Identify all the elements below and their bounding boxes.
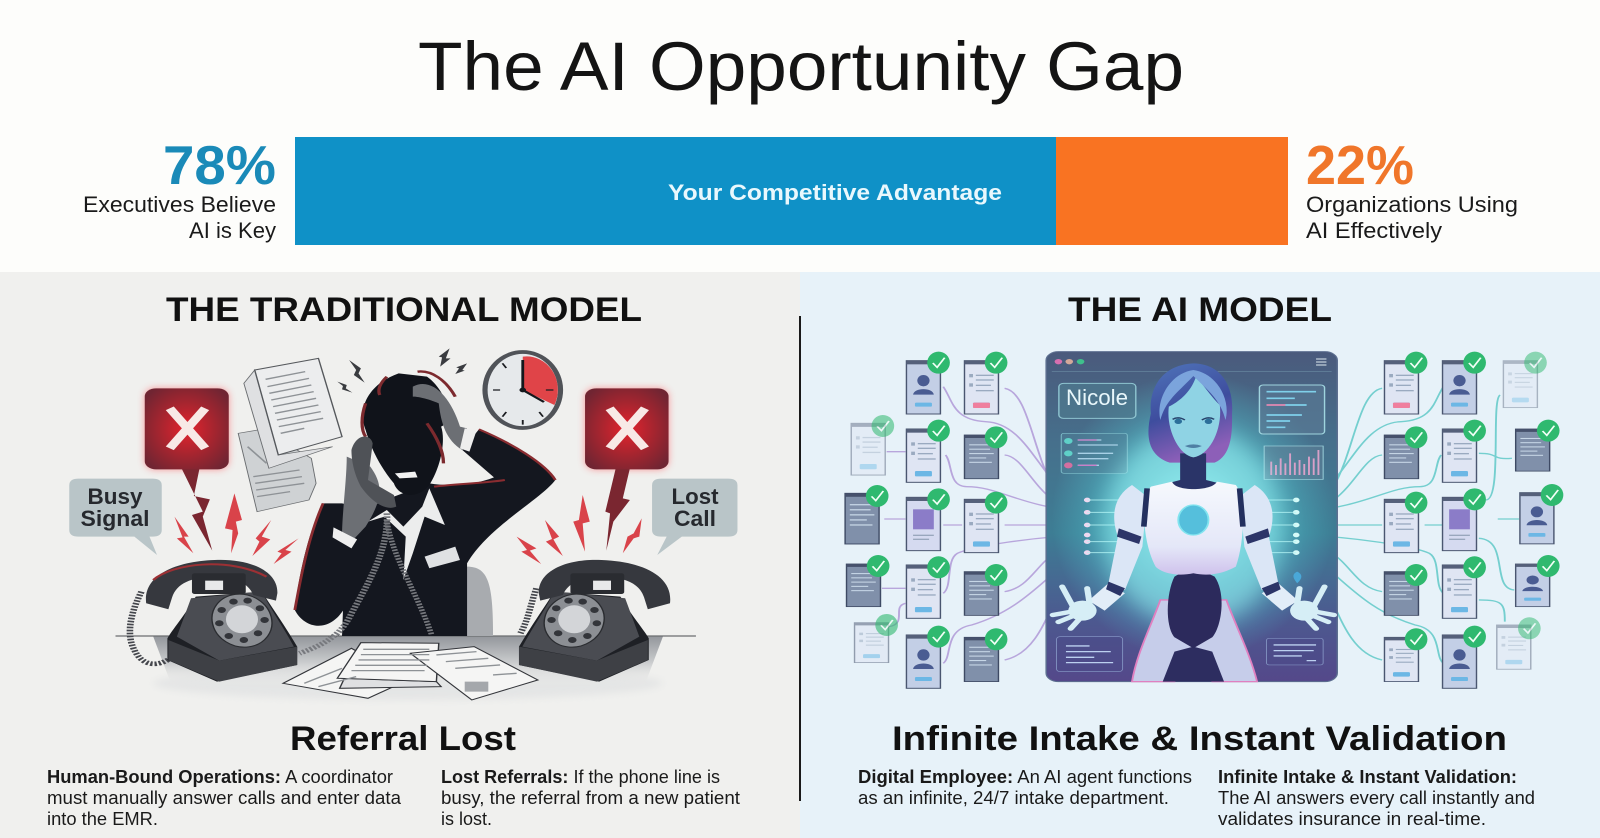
link dots — [1084, 498, 1090, 555]
AI woman figure — [1053, 363, 1334, 682]
stat: 78 percent: AI is Key — [189, 218, 276, 243]
illustration: AI agent connected to documents — [845, 352, 1563, 688]
speech bubble: lost — [652, 479, 737, 555]
bubble label: lost call: Call — [674, 506, 716, 531]
text: lost referrals: Lost Referrals: If the phone line is — [441, 767, 720, 787]
panel: traditional model — [0, 272, 800, 838]
text: infinite intake validation: validates insurance in real-time. — [1218, 809, 1486, 829]
bubble label: lost call — [672, 484, 719, 531]
stat: 78 percent — [83, 134, 276, 243]
stress marks — [337, 348, 467, 393]
hand on phone — [342, 457, 379, 542]
document cards left — [845, 361, 998, 688]
speech bubble: busy — [69, 479, 162, 555]
hand on head — [413, 384, 467, 450]
bubble label: busy signal — [80, 484, 150, 531]
heading: traditional: THE TRADITIONAL MODEL — [166, 291, 642, 329]
stat: 22 percent: 22% — [1306, 134, 1414, 196]
text: lost referrals: is lost. — [441, 809, 492, 829]
head and hair — [363, 373, 448, 495]
mouth — [395, 472, 418, 478]
subheading: infinite intake: Infinite Intake & Instant Validation — [892, 720, 1507, 758]
shirt — [368, 488, 445, 580]
stat: 22 percent: AI Effectively — [1306, 218, 1442, 243]
text: digital employee: Digital Employee: An AI agent functions — [858, 767, 1192, 787]
stat: 78 percent: 78% — [163, 134, 276, 196]
Nicole name box — [1059, 383, 1136, 418]
lightning bolts — [174, 493, 642, 564]
subheading: referral lost: Referral Lost — [290, 720, 516, 758]
text: infinite intake validation: The AI answers every call instantly and — [1218, 788, 1535, 808]
flying papers — [238, 429, 316, 512]
text: lost referrals: busy, the referral from a new patient — [441, 788, 740, 808]
text: human-bound operations — [47, 767, 402, 829]
text: digital employee: as an infinite, 24/7 intake department. — [858, 788, 1169, 808]
stat: 22 percent: Organizations Using — [1306, 192, 1518, 217]
bar chart panel — [1264, 446, 1323, 479]
text: human-bound operations: into the EMR. — [47, 809, 158, 829]
gap bar — [295, 137, 1288, 245]
chair — [455, 567, 493, 636]
text: human-bound operations: must manually answer calls and enter data — [47, 788, 402, 808]
text: human-bound operations: Human-Bound Operations: A coordinator — [47, 767, 393, 787]
warning: left red X — [145, 388, 229, 551]
data panel left — [1061, 433, 1127, 473]
badge — [425, 547, 460, 568]
bubble label: lost call: Lost — [672, 484, 719, 509]
chest plate — [1144, 482, 1243, 575]
person jacket — [295, 429, 555, 636]
stat: 22 percent — [1306, 134, 1518, 243]
text: infinite intake validation: Infinite Intake & Instant Validation: — [1218, 767, 1517, 787]
desk papers — [283, 643, 538, 700]
heading: AI model: THE AI MODEL — [1068, 291, 1332, 329]
bar label: Your Competitive Advantage — [668, 180, 1002, 205]
bubble label: busy signal: Busy — [88, 484, 143, 509]
text: infinite intake validation — [1218, 767, 1535, 829]
agent screen — [1046, 352, 1337, 682]
text: lost referrals — [441, 767, 740, 829]
document cards right — [1384, 361, 1554, 688]
green check marks — [866, 352, 1563, 650]
name label: Nicole: Nicole — [1066, 385, 1128, 410]
title: The AI Opportunity Gap — [418, 28, 1184, 105]
data panel right — [1259, 385, 1325, 434]
telephone: left — [130, 560, 297, 682]
coiled cords — [300, 513, 387, 653]
chest emblem — [1178, 505, 1208, 535]
panel: AI model — [800, 272, 1600, 838]
illustration: stressed coordinator with phones — [69, 348, 737, 700]
center divider — [799, 316, 801, 801]
arm left — [1053, 485, 1147, 629]
warning: right red X — [585, 388, 669, 551]
clock — [485, 352, 561, 428]
lower info panels — [1057, 637, 1323, 672]
arm right — [1240, 485, 1334, 629]
connection lines right — [1300, 387, 1519, 663]
telephone: right — [519, 560, 670, 682]
waist — [1168, 572, 1222, 648]
hips and legs — [1132, 600, 1257, 682]
stat: 78 percent: Executives Believe — [83, 192, 276, 217]
bubble label: busy signal: Signal — [80, 506, 150, 531]
connection lines left — [882, 387, 1087, 663]
text: digital employee — [858, 767, 1192, 808]
